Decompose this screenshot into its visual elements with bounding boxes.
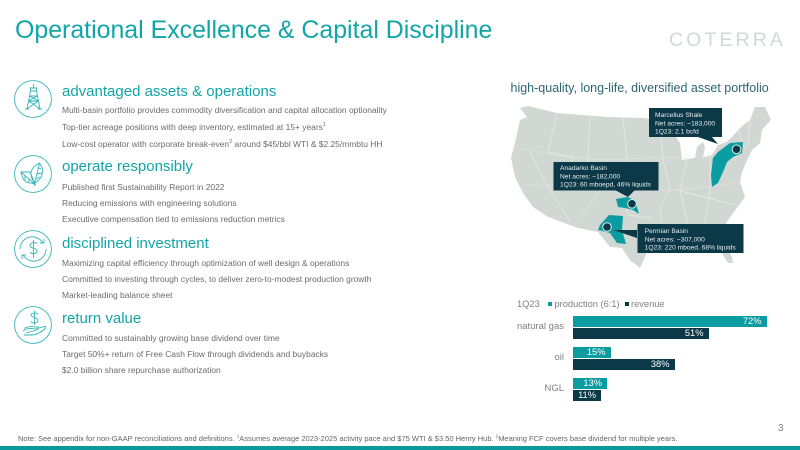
callout: Anadarko: Net acres: ~182,000: [560, 173, 620, 180]
basin: Marcellus: [711, 142, 743, 187]
bar: natural gas revenue: [572, 328, 708, 339]
bar: NGL production: [572, 378, 607, 389]
text: Committed to sustainably growing base dividend over time: [62, 333, 280, 343]
bar: oil revenue: 38%: [651, 358, 670, 368]
heading: return value: [62, 310, 141, 327]
callout: Permian: 1Q23: 220 mboed, 68% liquids: [645, 245, 736, 252]
icon: oil derrick: [14, 80, 52, 118]
text: Reducing emissions with engineering solutions: [62, 198, 237, 208]
legend: revenue: revenue: [631, 299, 665, 309]
text: Maximizing capital efficiency through optimization of well design & operations: [62, 258, 349, 268]
text: Top-tier acreage positions with deep inventory, estimated at 15+ years1: [62, 122, 326, 132]
text: Multi-basin portfolio provides commodity diversification and capital allocation optionality: [62, 105, 387, 115]
bar: oil revenue: [572, 358, 674, 370]
bar: NGL revenue: [572, 390, 601, 400]
bar chart label: period: 1Q23: [517, 299, 540, 309]
heading: advantaged assets & operations: [62, 83, 276, 100]
text: Committed to investing through cycles, to deliver zero-to-modest production growth: [62, 274, 371, 284]
bar: natural gas production: [572, 316, 766, 327]
panel: operate responsibly: [14, 155, 285, 224]
basin: Permian: [598, 215, 626, 244]
callout: Permian: Net acres: ~307,000: [645, 236, 705, 243]
icon: leaves: [14, 155, 52, 193]
text: Published first Sustainability Report in 2022: [62, 182, 224, 192]
marker: Marcellus: [732, 145, 741, 154]
icon: hand with dollar: [14, 306, 52, 344]
category: oil: oil: [554, 352, 564, 363]
text: Market-leading balance sheet: [62, 290, 172, 300]
category: NGL: NGL: [544, 383, 564, 394]
marker: Anadarko: [628, 200, 636, 208]
text: Low-cost operator with corporate break-even2 around $45/bbl WTI & $2.25/mmbtu HH: [62, 138, 382, 148]
callout: Anadarko: [554, 162, 658, 190]
bottom band: [0, 446, 800, 450]
footnote: Note: See appendix for non-GAAP reconciliations and definitions. 1Assumes average 2023-2025 activity pace and $75 WTI & $3.50 Henry Hub. 2Meaning FCF covers base dividend for multiple years.: [18, 434, 677, 443]
category: natural gas: natural gas: [517, 321, 564, 332]
callout: Permian tail: [613, 230, 637, 238]
state lines: [513, 113, 750, 235]
icon: dollar cycle: [14, 230, 52, 268]
heading: operate responsibly: [62, 158, 193, 175]
bar: NGL production: 13%: [583, 378, 602, 388]
callout: Marcellus: Marcellus Shale: [655, 112, 703, 119]
bar: NGL revenue: 11%: [578, 390, 596, 400]
callout: Permian: [638, 224, 744, 253]
map: US basins: [511, 106, 771, 268]
text: Executive compensation tied to emissions reduction metrics: [62, 214, 285, 224]
panel: return value: [14, 306, 328, 375]
bar: natural gas revenue: 51%: [685, 328, 704, 338]
page number: 3: [778, 423, 784, 434]
title: Operational Excellence & Capital Discipline: [15, 16, 492, 44]
callout: Marcellus: [649, 108, 722, 137]
callout: Anadarko: Anadarko Basin: [560, 165, 607, 172]
heading: disciplined investment: [62, 235, 209, 252]
bar: oil production: 15%: [587, 347, 606, 357]
logo: Coterra: COTERRA: [669, 29, 786, 51]
callout: Permian: Permian Basin: [645, 228, 688, 235]
callout: Anadarko: 1Q23: 60 mboepd, 46% liquids: [560, 182, 652, 189]
callout: Marcellus tail: [698, 137, 718, 144]
callout: Anadarko tail: [615, 190, 635, 197]
US outline: [511, 106, 771, 268]
basin: Anadarko: [616, 197, 639, 214]
callout: Marcellus: Net acres: ~183,000: [655, 120, 715, 127]
bar: oil production: [572, 347, 610, 358]
legend: production: production (6:1): [554, 299, 620, 309]
callout: Marcellus: 1Q23: 2.1 bcfd: [655, 128, 699, 135]
panel: advanced assets: [14, 80, 387, 148]
marker: Permian: [603, 223, 611, 231]
map heading: high-quality, long-life, diversified asset portfolio: [510, 81, 769, 95]
text: $2.0 billion share repurchase authorization: [62, 365, 221, 375]
panel: disciplined investment: [14, 230, 371, 300]
bar: natural gas production: 72%: [743, 316, 762, 326]
text: Target 50%+ return of Free Cash Flow through dividends and buybacks: [62, 349, 328, 359]
